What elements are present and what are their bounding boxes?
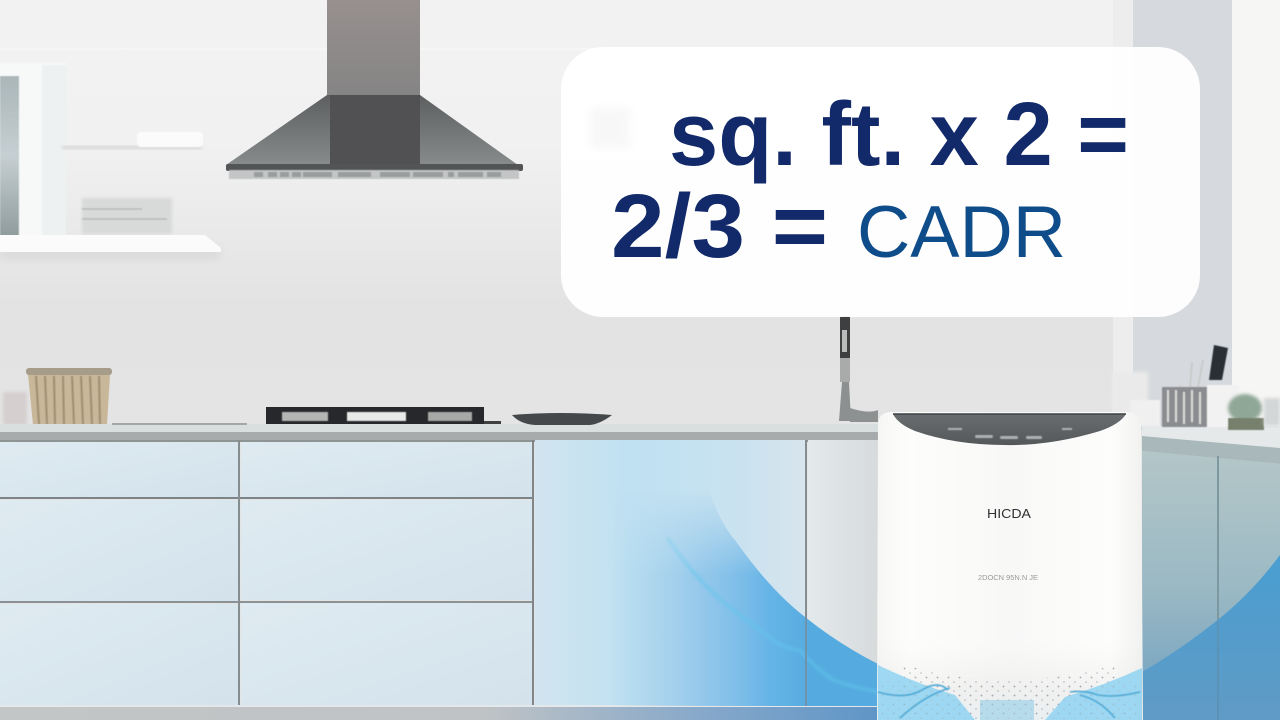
open shelf with bowl and plates bbox=[0, 132, 221, 260]
counter items: utensil holder, knife and plant bbox=[1112, 345, 1280, 430]
purifier brand label: HICDA bbox=[987, 506, 1031, 521]
CADR label: CADR bbox=[857, 192, 1066, 273]
air purifier bbox=[877, 412, 1143, 720]
left wall cabinet with window bbox=[0, 63, 66, 243]
formula panel bbox=[561, 47, 1200, 317]
range hood bbox=[226, 0, 523, 179]
right counter and cabinets bbox=[1142, 426, 1280, 720]
right wall columns bbox=[1113, 0, 1280, 440]
purifier bottom air streams bbox=[878, 665, 1142, 720]
counter basket bbox=[3, 368, 112, 425]
cooktop bbox=[112, 407, 501, 425]
plate bbox=[512, 413, 612, 425]
faucet bbox=[839, 316, 878, 422]
formula line 1: sq. ft. x 2 = bbox=[669, 85, 1129, 185]
counter and base cabinets bbox=[0, 424, 880, 720]
air flow wave: right bbox=[1142, 555, 1280, 720]
air flow wave: left bbox=[622, 502, 878, 706]
purifier control panel bbox=[893, 414, 1126, 445]
formula line 2: 2/3 = bbox=[611, 177, 828, 277]
purifier small label: 2DOCN 95N.N JE bbox=[978, 575, 1038, 582]
purifier dotted grille bbox=[884, 665, 1138, 720]
